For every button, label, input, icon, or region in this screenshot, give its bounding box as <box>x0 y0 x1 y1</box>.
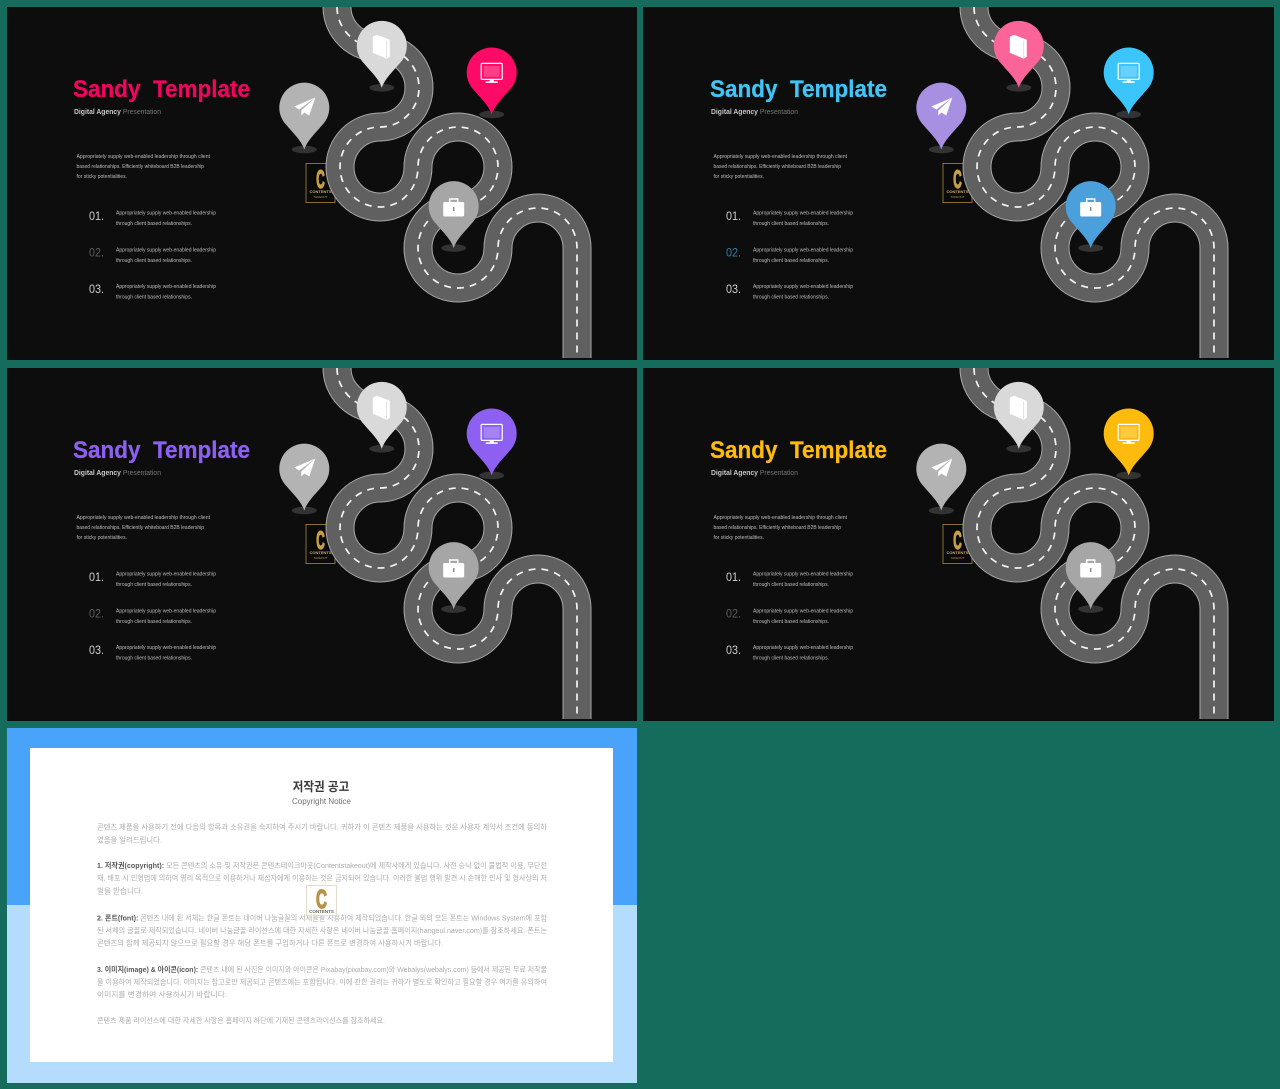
pin: briefcase <box>1066 542 1116 613</box>
list item 01: 01. <box>89 572 104 584</box>
list item 01: Appropriately supply web-enabled leadership <box>116 572 216 578</box>
intro text: based relationships. Efficiently whiteboard B2B leadership <box>76 525 204 531</box>
pin: paper plane <box>279 444 329 514</box>
pin: paper plane <box>916 83 966 153</box>
list item 03: through client based relationships. <box>116 294 192 300</box>
section 2: font: 된 서체의 글꼴로 제작되었습니다. 네이버 나눔글꼴 라이선스에 대한 자세한 사항은 네이버 나눔글꼴 홈페이지(hangeul.naver.com)를 참조하세요. 폰트는 <box>97 925 547 935</box>
list item 03: 03. <box>726 284 741 296</box>
list item 03: Appropriately supply web-enabled leadership <box>116 284 216 290</box>
panel: blue slide <box>643 7 1274 360</box>
intro text: based relationships. Efficiently whiteboard B2B leadership <box>76 164 204 170</box>
list item 03: Appropriately supply web-enabled leadership <box>753 645 853 651</box>
list item 02 <box>726 608 853 625</box>
intro text: for sticky potentialities. <box>714 535 764 541</box>
panel: yellow slide <box>643 368 1274 721</box>
list item 01 <box>89 210 216 227</box>
panel: pink slide <box>7 7 637 360</box>
panel: purple slide <box>7 368 637 721</box>
list item 03: through client based relationships. <box>753 656 829 662</box>
intro text: based relationships. Efficiently whiteboard B2B leadership <box>714 525 841 531</box>
list item 01: through client based relationships. <box>753 221 829 227</box>
list item 02: Appropriately supply web-enabled leadership <box>116 248 216 254</box>
intro text: Appropriately supply web-enabled leadership through client <box>76 515 211 521</box>
pin: briefcase <box>1066 181 1116 252</box>
intro text: Appropriately supply web-enabled leadership through client <box>714 515 848 521</box>
list item 03: 03. <box>726 645 741 657</box>
subtitle: Digital Agency Presentation <box>74 470 161 477</box>
intro text <box>714 515 848 541</box>
heading: Sandy Template <box>710 437 887 464</box>
pin: monitor <box>467 409 517 479</box>
list item 01 <box>89 572 216 588</box>
list item 01: 01. <box>726 572 741 584</box>
section 2: font: 2. 폰트(font): 콘텐츠 내에 된 서체는 한글 폰트는 네이버 나눔글꼴의 서체들을 사용하여 제작되었습니다. 한글 외의 모든 폰트는 Windows System에 포함 <box>97 913 547 923</box>
section 1: copyright: 1. 저작권(copyright): 모든 콘텐츠의 소유 및 저작권은 콘텐츠테이크아웃(Contentstakeout)에 제작사에게 있습니다. 사전 승낙 없이 불법적 이용, 무단전 <box>97 860 547 870</box>
list item 02: Appropriately supply web-enabled leadership <box>753 608 853 614</box>
list item 01: through client based relationships. <box>116 221 192 227</box>
intro text: based relationships. Efficiently whiteboard B2B leadership <box>714 164 841 170</box>
section 1: copyright: 재, 배포 시 민형법에 의하여 영리 목적으로 이용하거나 제삼자에게 이용하는 것은 금지되어 있습니다. 이러한 불법 행위 발견 시 손해한 민사 및 형사상의 처 <box>97 873 547 883</box>
list item 02: 02. <box>726 608 741 620</box>
winding road <box>974 7 1214 358</box>
winding road <box>337 368 577 719</box>
section 1: copyright <box>97 860 547 896</box>
intro text: for sticky potentialities. <box>714 174 764 180</box>
list item 01: through client based relationships. <box>116 582 192 588</box>
logo watermark: C <box>316 884 327 914</box>
subtitle: Digital Agency Presentation <box>74 109 161 116</box>
pin: monitor <box>1104 48 1154 118</box>
pin: book <box>357 382 407 452</box>
panel: copyright notice <box>7 728 637 1083</box>
list item 03 <box>89 645 216 662</box>
logo watermark <box>943 164 972 202</box>
list item 03: Appropriately supply web-enabled leadership <box>753 284 853 290</box>
section 3: image and icon: 이미지를 변경하여 사용하시기 바랍니다. <box>97 989 227 999</box>
notice title: 저작권 공고 <box>293 779 349 794</box>
logo watermark <box>943 524 972 564</box>
logo watermark <box>306 884 336 916</box>
pin: paper plane <box>279 83 329 153</box>
list item 02 <box>726 248 853 264</box>
heading: Sandy Template <box>73 76 250 103</box>
subtitle: Digital Agency Presentation <box>711 109 798 116</box>
section 3: image and icon: 3. 이미지(image) & 아이콘(icon): 콘텐츠 내에 된 사진은 이미지와 아이콘은 Pixabay(pixabay.com)와 Webalys(webalys.com) 등에서 제공된 무료 저작물 <box>97 964 547 974</box>
list item 01 <box>726 210 853 227</box>
winding road <box>974 368 1214 719</box>
list item 02: through client based relationships. <box>753 619 829 625</box>
notice subtitle: Copyright Notice <box>292 796 351 806</box>
logo watermark <box>306 524 335 564</box>
list item 03: 03. <box>89 284 104 296</box>
list item 01: Appropriately supply web-enabled leadership <box>753 210 853 216</box>
pin: briefcase <box>429 542 479 613</box>
section 2: font <box>97 913 547 948</box>
list item 02: 02. <box>89 248 104 260</box>
list item 01: 01. <box>89 211 104 223</box>
intro paragraph: 콘텐츠 제품을 사용하기 전에 다음의 항목과 소유권을 숙지하여 주시기 바랍니다. 귀하가 이 콘텐츠 제품을 사용하는 것은 사용자 계약서 조건에 동의하 <box>97 822 547 832</box>
list item 01: 01. <box>726 211 741 223</box>
intro text: for sticky potentialities. <box>76 174 127 180</box>
subtitle: Digital Agency Presentation <box>711 470 798 477</box>
list item 03: through client based relationships. <box>116 656 192 662</box>
list item 01: Appropriately supply web-enabled leadership <box>753 572 853 578</box>
list item 02: Appropriately supply web-enabled leadership <box>116 608 216 614</box>
pin: monitor <box>467 48 517 118</box>
list item 02 <box>89 248 216 264</box>
list item 03: Appropriately supply web-enabled leadership <box>116 645 216 651</box>
heading: Sandy Template <box>710 76 887 103</box>
list item 02: Appropriately supply web-enabled leadership <box>753 248 853 254</box>
list item 02: 02. <box>89 608 104 620</box>
intro text <box>76 515 211 541</box>
intro paragraph: 였음을 알려드립니다. <box>97 834 162 844</box>
list item 03: through client based relationships. <box>753 294 829 300</box>
section 1: copyright: 벌을 받습니다. <box>97 886 143 896</box>
list item 02 <box>89 608 216 625</box>
section 2: font: 콘텐츠의 함께 제공되지 않으므로 필요할 경우 해당 폰트를 구입하거나 다른 폰트로 변경하여 사용하시기 바랍니다. <box>97 938 443 948</box>
list item 02: through client based relationships. <box>753 258 829 264</box>
list item 02: through client based relationships. <box>116 258 192 264</box>
list item 03: 03. <box>89 645 104 657</box>
intro text: Appropriately supply web-enabled leadership through client <box>714 154 848 160</box>
pin: briefcase <box>429 181 479 252</box>
heading: Sandy Template <box>73 437 250 464</box>
closing note: 콘텐츠 제품 라이선스에 대한 자세한 사항은 홈페이지 하단에 기재된 콘텐츠라이선스를 참조하세요. <box>97 1015 385 1025</box>
list item 03 <box>726 284 853 300</box>
pin: book <box>994 382 1044 452</box>
list item 01 <box>726 572 853 588</box>
pin: book <box>994 21 1044 91</box>
pin: book <box>357 21 407 91</box>
list item 02: 02. <box>726 248 741 260</box>
pin: paper plane <box>916 444 966 514</box>
intro text <box>714 154 848 180</box>
list item 03 <box>89 284 216 300</box>
list item 01: Appropriately supply web-enabled leadership <box>116 210 216 216</box>
list item 03 <box>726 645 853 662</box>
logo watermark: CONTENTS <box>309 909 334 914</box>
intro paragraph <box>97 822 547 844</box>
list item 01: through client based relationships. <box>753 582 829 588</box>
section 3: image and icon: 을 이용하여 제작되었습니다. 이미지는 참고로만 제공되고 콘텐츠에는 포함됩니다. 이에 관한 권리는 귀하가 별도로 확인하고 필요할 경우 여기를 유의하여 <box>97 977 547 987</box>
pin: monitor <box>1104 409 1154 479</box>
section 3: image and icon <box>97 964 547 999</box>
list item 02: through client based relationships. <box>116 619 192 625</box>
intro text: for sticky potentialities. <box>76 535 127 541</box>
intro text: Appropriately supply web-enabled leadership through client <box>76 154 211 160</box>
intro text <box>76 154 211 180</box>
winding road <box>337 7 577 358</box>
logo watermark <box>306 164 335 202</box>
